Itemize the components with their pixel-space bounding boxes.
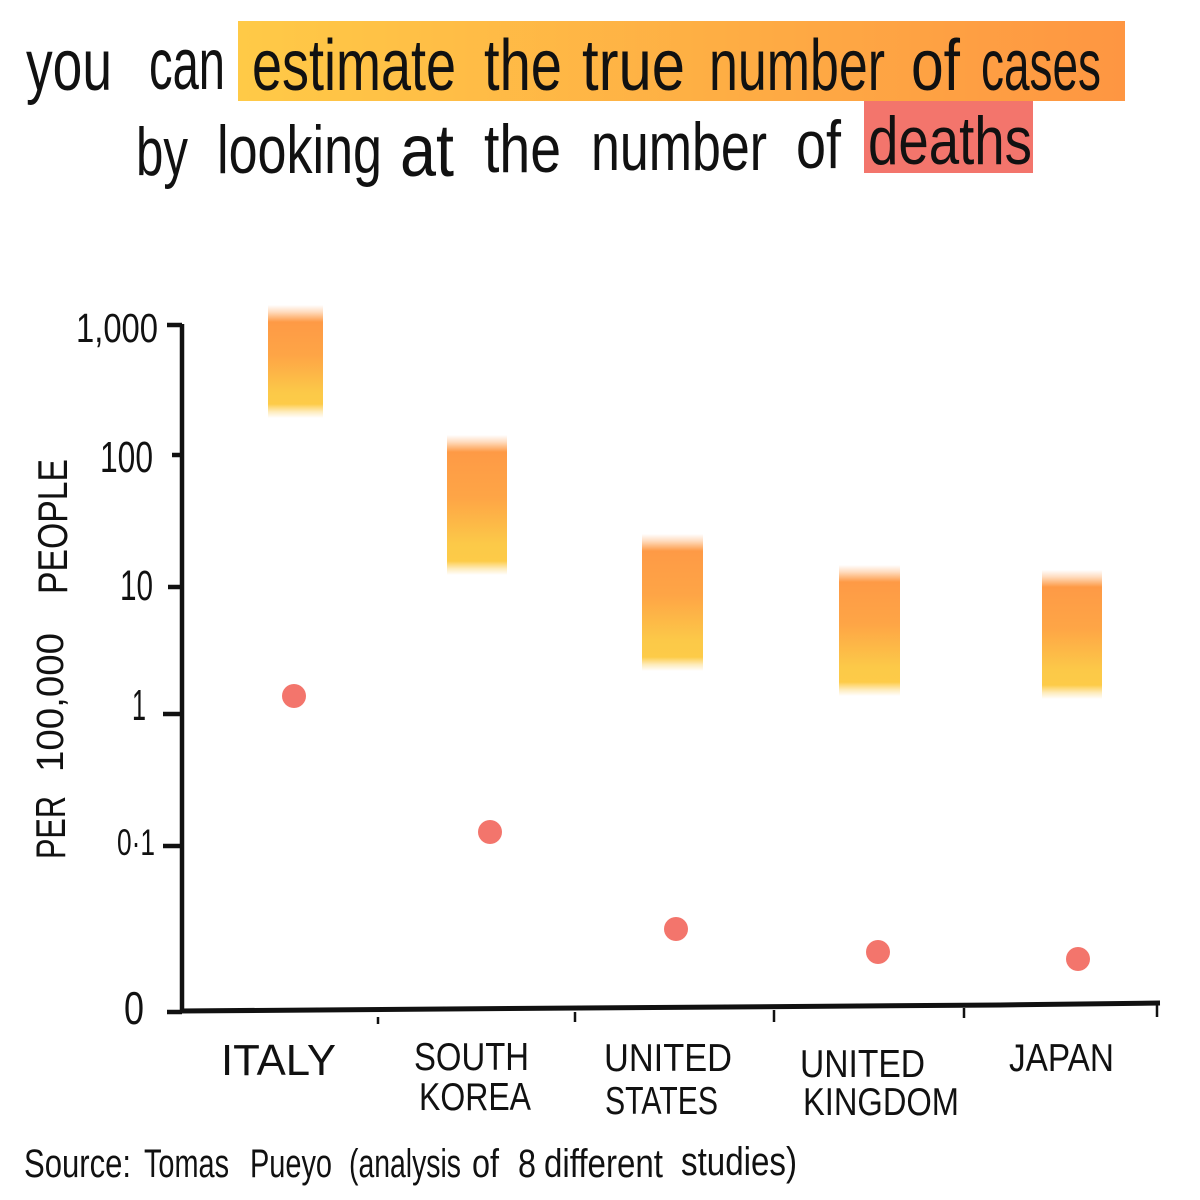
range bar: United States (642, 534, 703, 671)
title line 1: the (484, 26, 562, 106)
range bar: South Korea (447, 435, 507, 575)
label: United Kingdom (800, 1043, 959, 1124)
y axis title (27, 459, 76, 859)
label: South Korea (414, 1036, 531, 1119)
range bar: Japan (1042, 570, 1102, 699)
y axis labels: 0 (124, 982, 144, 1034)
title line 2: of (796, 107, 841, 183)
y axis (163, 324, 182, 1012)
death dot: United Kingdom (866, 940, 890, 964)
source (24, 1140, 797, 1186)
label: Italy: ITALY (221, 1036, 336, 1085)
title line 2: deaths (868, 103, 1032, 179)
label: United States: UNITED (604, 1037, 732, 1080)
title line 1: can (149, 25, 225, 105)
label: South Korea: KOREA (419, 1076, 531, 1119)
y axis labels: 0·1 (117, 822, 155, 863)
source: Source: (24, 1142, 131, 1186)
death dot: United States (664, 917, 688, 941)
x axis labels (221, 1036, 1114, 1124)
title line 2: looking (217, 112, 382, 188)
title line 1: cases (981, 26, 1101, 106)
highlight: estimate the true number of cases (238, 21, 1125, 101)
source: different (544, 1142, 663, 1186)
death dot: South Korea (478, 820, 502, 844)
source: Tomas (144, 1142, 229, 1186)
y axis title: PEOPLE (29, 459, 76, 594)
y axis labels: 100 (100, 433, 153, 482)
source: (analysis (349, 1142, 461, 1186)
label: United States (604, 1037, 732, 1123)
source: 8 (518, 1142, 536, 1186)
label: United Kingdom: UNITED (800, 1043, 925, 1086)
source: studies) (681, 1140, 797, 1184)
label: South Korea: SOUTH (414, 1036, 529, 1079)
title line 2: the (484, 111, 561, 187)
label: Japan: JAPAN (1009, 1037, 1114, 1080)
y axis title: PER (27, 796, 74, 859)
title line 2: at (400, 109, 454, 192)
highlight: deaths (864, 101, 1033, 173)
y axis title: 100,000 (30, 633, 72, 772)
title text (26, 25, 1101, 192)
y axis labels (76, 305, 158, 1034)
range bar: Italy (268, 305, 323, 418)
title line 2: number (591, 109, 767, 185)
title line 1 (26, 25, 1101, 106)
y axis labels: 10 (120, 562, 153, 610)
y axis labels: 1,000 (76, 305, 158, 351)
label: United States: STATES (605, 1080, 718, 1123)
title line 2 (136, 103, 1032, 192)
title (26, 21, 1125, 192)
title line 1: of (911, 26, 961, 106)
source: Pueyo (250, 1142, 332, 1186)
title line 1: estimate (252, 26, 456, 106)
title line 2: by (136, 114, 188, 190)
y axis labels: 1 (132, 681, 146, 730)
death dot: Japan (1066, 947, 1090, 971)
source: of (472, 1142, 500, 1186)
death dot: Italy (282, 684, 306, 708)
label: United Kingdom: KINGDOM (803, 1081, 959, 1124)
title line 1: you (26, 26, 112, 106)
title line 1: number (709, 26, 885, 106)
range bar: United Kingdom (839, 565, 900, 696)
x axis (180, 1003, 1160, 1024)
title line 1: true (582, 26, 685, 106)
